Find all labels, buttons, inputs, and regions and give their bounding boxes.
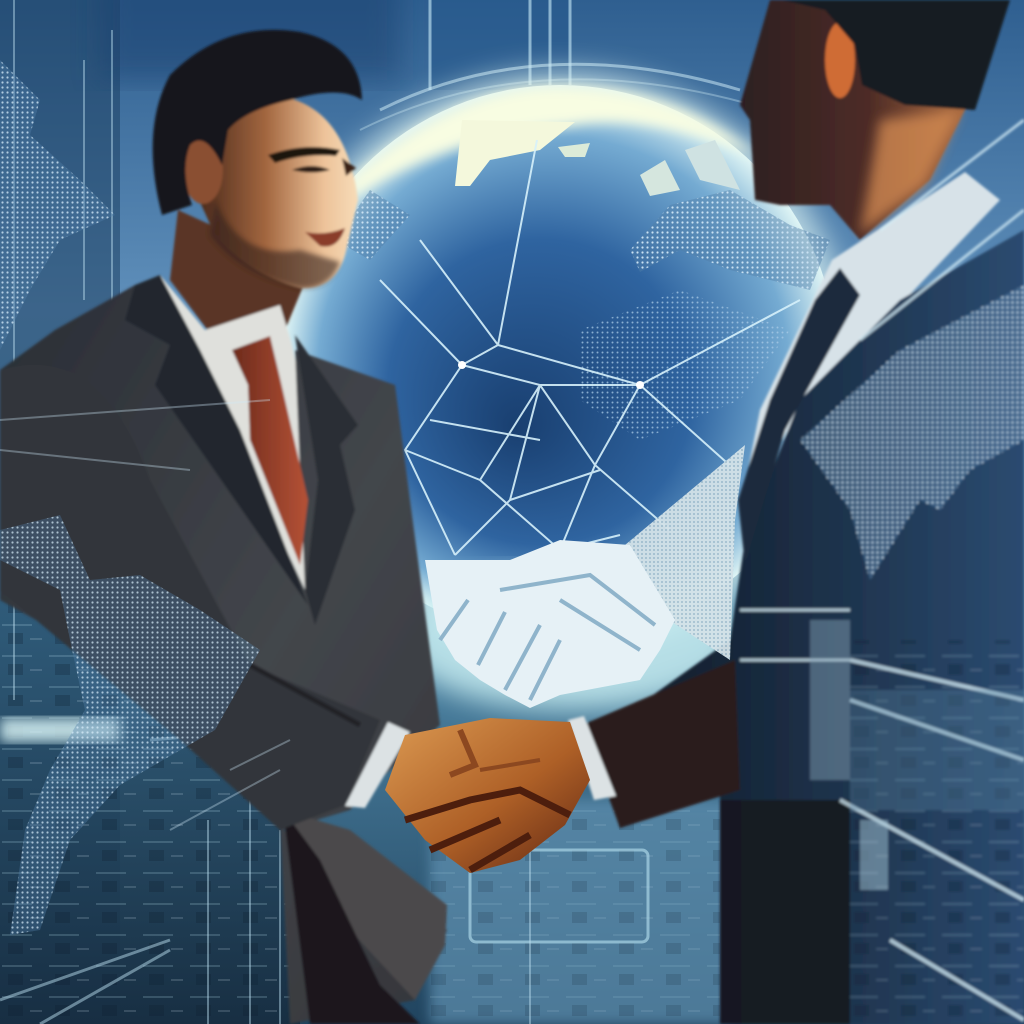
world map: left side upper continent	[0, 60, 115, 350]
neck light	[860, 110, 960, 235]
continents on globe	[335, 120, 830, 440]
light streaks overlay	[0, 400, 290, 830]
city panels, lower right	[850, 640, 1024, 1024]
ear	[183, 136, 223, 204]
hair	[782, 0, 1010, 110]
dotted map over right shoulder	[800, 285, 1024, 580]
dark lower column	[720, 800, 850, 1024]
jacket	[0, 285, 447, 1024]
jacket	[590, 230, 1024, 1024]
head	[740, 0, 1000, 240]
bright glow behind the holographic hand	[400, 570, 740, 710]
network lines	[380, 140, 800, 555]
beard	[210, 200, 340, 288]
lower jacket panel	[283, 810, 447, 1000]
hair	[153, 30, 362, 215]
cuff	[568, 716, 616, 800]
real handshake	[385, 718, 590, 873]
ear	[825, 22, 855, 98]
world map: lower left continent overlay	[0, 515, 260, 935]
bright glow at top of globe	[350, 86, 755, 200]
neck	[170, 210, 310, 340]
globe	[268, 70, 852, 710]
shirt collar	[740, 172, 1000, 510]
person: right man	[568, 0, 1024, 1024]
arm shading	[0, 365, 380, 830]
sleeve (dark)	[582, 660, 740, 828]
head	[190, 95, 358, 288]
cuff	[345, 722, 410, 808]
brows, eye and mouth	[268, 147, 356, 247]
glass light panels	[740, 120, 1024, 1020]
tie	[738, 268, 860, 565]
lapels	[125, 275, 308, 605]
tie	[232, 336, 308, 565]
shirt collar	[160, 275, 320, 590]
person: left man	[0, 30, 447, 1024]
holographic handshake	[425, 445, 745, 708]
